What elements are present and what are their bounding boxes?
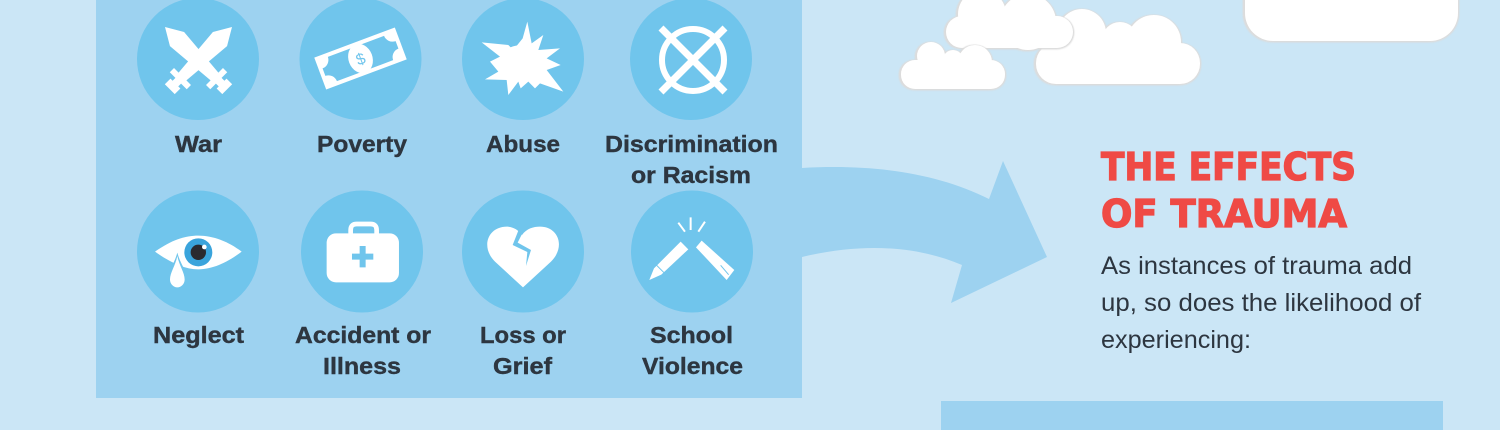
- item: poverty: [300, 0, 422, 157]
- icon: dollar bill: [314, 28, 407, 89]
- text block: intro: up, so does the likelihood of: [1101, 289, 1421, 317]
- label: school violence: School: [650, 322, 733, 348]
- cloud: top centre: [946, 0, 1073, 50]
- label: loss or grief: [480, 322, 566, 379]
- item: neglect: Neglect: [153, 322, 244, 348]
- cloud: top right: [1245, 0, 1458, 41]
- text block: intro: [1101, 252, 1421, 354]
- item: abuse: Abuse: [486, 131, 560, 157]
- icon: dollar bill: $: [354, 50, 368, 69]
- label: accident or illness: Accident or: [295, 322, 431, 348]
- label: loss or grief: Grief: [493, 353, 552, 379]
- label: loss or grief: Loss or: [480, 322, 566, 348]
- heading: the effects of trauma: THE EFFECTS: [1101, 145, 1356, 190]
- item: loss or grief: [462, 190, 584, 379]
- text block: intro: As instances of trauma add: [1101, 252, 1412, 280]
- icon: broken pencil: [649, 217, 734, 280]
- label: discrimination or racism: [605, 131, 778, 188]
- label: school violence: Violence: [642, 353, 743, 379]
- item: school violence: [631, 190, 753, 379]
- text block: intro: experiencing:: [1101, 326, 1251, 354]
- item: neglect: [137, 190, 259, 348]
- item: discrimination or racism: [605, 0, 778, 188]
- item: abuse: [462, 0, 584, 157]
- icon: first aid kit: [327, 224, 399, 282]
- label: discrimination or racism: Discrimination: [605, 131, 778, 157]
- item: accident or illness: [295, 190, 431, 379]
- label: accident or illness: [295, 322, 431, 379]
- icon: burst: [482, 22, 563, 95]
- item: poverty: Poverty: [317, 131, 407, 157]
- heading: the effects of trauma: [1101, 145, 1356, 237]
- heading: the effects of trauma: OF TRAUMA: [1101, 192, 1347, 237]
- panel: effects list (cropped): [941, 401, 1443, 430]
- label: school violence: [642, 322, 743, 379]
- panel: causes of trauma: [96, 0, 802, 398]
- label: accident or illness: Illness: [323, 353, 401, 379]
- icon: crossed swords: [157, 19, 240, 98]
- icon: crossed-out circle: [661, 28, 725, 92]
- icon: broken heart: [487, 227, 559, 287]
- item: war: War: [175, 131, 222, 157]
- cloud: middle large: [1036, 9, 1200, 84]
- icon: crying eye: [155, 236, 242, 290]
- arrow: causes to effects: [802, 161, 1047, 303]
- cloud: small left: [901, 42, 1005, 89]
- label: discrimination or racism: or Racism: [631, 162, 751, 188]
- item: war: [137, 0, 259, 157]
